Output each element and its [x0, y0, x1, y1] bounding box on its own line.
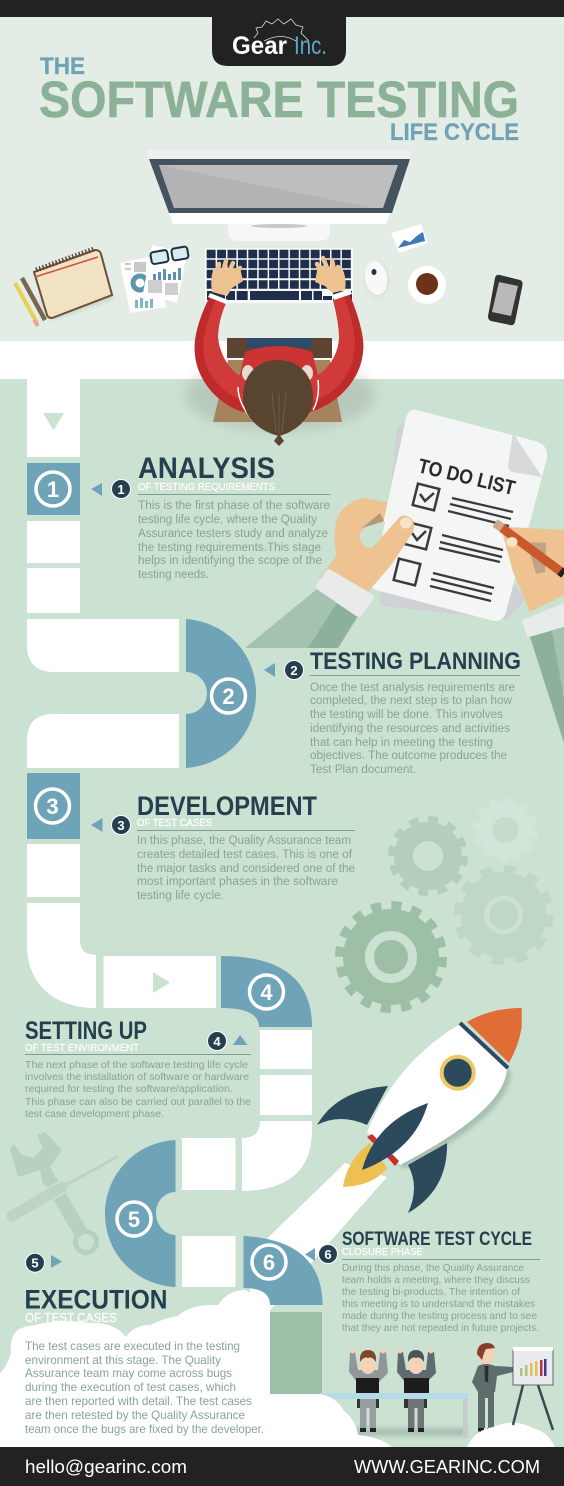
- panel: execution: OF TEST CASES: [25, 1310, 117, 1325]
- panel: setting up: involves the installation of software or hardware: [25, 1071, 249, 1083]
- mouse: [362, 259, 390, 298]
- clouds: [0, 1290, 555, 1447]
- panel: development: most important phases in the software: [137, 876, 338, 888]
- panel: development: 3: [117, 818, 125, 833]
- logo: Gear Inc.: Inc.: [294, 32, 327, 60]
- panel: setting up: This phase can also be carried out parallel to the: [25, 1096, 251, 1108]
- panel: analysis: testing needs.: [138, 569, 209, 581]
- panel: execution: are then retested by the Quality Assurance: [25, 1408, 245, 1422]
- person at desk: [185, 258, 375, 446]
- panel: analysis: This is the first phase of the software: [138, 500, 330, 512]
- footer: [0, 1447, 564, 1486]
- panel: software test cycle closure: During this phase, the Quality Assurance: [342, 1262, 524, 1274]
- step 2 path block: 2: [222, 684, 235, 709]
- panel: testing planning: TESTING PLANNING: [310, 648, 521, 675]
- panel: analysis: [91, 452, 330, 581]
- panel: software test cycle closure: team holds a meeting, where they discuss: [342, 1274, 530, 1286]
- meeting people: [320, 1343, 513, 1438]
- panel: setting up: 4: [213, 1034, 221, 1049]
- panel: development: In this phase, the Quality Assurance team: [137, 835, 351, 847]
- to do list illustration: TO DO LIST: [416, 454, 518, 500]
- panel: testing planning: [264, 648, 521, 776]
- notebook and pencils: [15, 249, 114, 326]
- panel: testing planning: identifying the resources and activities: [310, 723, 510, 735]
- coffee cup: [408, 266, 446, 304]
- step 1 path block: 1: [47, 477, 59, 502]
- panel: analysis: ANALYSIS: [138, 452, 275, 485]
- panel: development: OF TEST CASES: [137, 817, 212, 829]
- panel: execution: environment at this stage. The Quality: [25, 1353, 221, 1367]
- footer: WWW.GEARINC.COM: [354, 1457, 540, 1477]
- rocket: [317, 1008, 522, 1213]
- panel: development: [91, 791, 355, 902]
- panel: setting up: The next phase of the software testing life cycle: [25, 1059, 248, 1071]
- panel: analysis: 1: [117, 482, 125, 497]
- step 5 path block: [105, 1140, 176, 1287]
- step 1 path block: [27, 463, 80, 515]
- panel: development: creates detailed test cases. This is one of: [137, 849, 353, 861]
- panel: software test cycle closure: CLOSURE PHASE: [342, 1246, 423, 1258]
- panel: setting up: test case development phase.: [25, 1108, 164, 1120]
- step 2 path block: [27, 619, 256, 768]
- top bar: [0, 0, 564, 17]
- title: LIFE CYCLE: [390, 119, 519, 146]
- panel: execution: [24, 1253, 264, 1436]
- panel: software test cycle closure: this meeting is to understand the mistakes: [342, 1298, 535, 1310]
- panel: software test cycle closure: that they are not repeated in future projects.: [342, 1322, 539, 1334]
- panel: development: the major tasks and considered one of the: [137, 863, 355, 875]
- step 6 path block: [244, 1236, 323, 1394]
- panel: testing planning: Once the test analysis requirements are: [310, 682, 515, 694]
- panel: testing planning: the testing will be done. This involves: [310, 709, 503, 721]
- panel: software test cycle closure: made during the testing process and to see: [342, 1310, 537, 1322]
- phone: [488, 275, 523, 325]
- panel: execution: The test cases are executed in the testing: [25, 1339, 240, 1353]
- step 4 path block: [221, 956, 312, 1027]
- desk edge band: [0, 341, 564, 379]
- title: THE: [40, 53, 85, 80]
- logo: Gear Inc.: [212, 17, 346, 66]
- panel: execution: during the execution of test cases, which: [25, 1380, 236, 1394]
- path segments: top column: [27, 379, 80, 613]
- logo: Gear Inc.: Gear: [232, 32, 287, 60]
- papers and glasses: [120, 245, 189, 313]
- presentation board with chart: [513, 1347, 553, 1430]
- panel: development: testing life cycle.: [137, 890, 224, 902]
- to do list illustration: [245, 410, 564, 743]
- panel: software test cycle closure: 6: [324, 1247, 332, 1262]
- step 5 path block: 5: [128, 1207, 140, 1232]
- panel: analysis: the testing requirements.This stage: [138, 542, 321, 554]
- panel: software test cycle closure: [305, 1229, 540, 1334]
- rocket trail: [250, 1163, 387, 1310]
- panel: execution: Assurance team may come across bugs: [25, 1366, 232, 1380]
- keyboard: [205, 248, 353, 303]
- monitor: [147, 150, 411, 241]
- wrench and screwdriver icon: [10, 1132, 117, 1252]
- step 3 path block: 3: [46, 794, 59, 819]
- step 4 path block: 4: [260, 980, 273, 1005]
- header background: [0, 0, 564, 341]
- title: [39, 53, 519, 146]
- footer: hello@gearinc.com: [25, 1457, 187, 1477]
- panel: testing planning: 2: [290, 663, 298, 678]
- panel: testing planning: objectives. The outcome produces the: [310, 750, 507, 762]
- gears illustration: [343, 802, 547, 1005]
- panel: analysis: Assurance testers study and analyze: [138, 528, 328, 540]
- panel: setting up: OF TEST ENVIRONMENT: [25, 1042, 140, 1054]
- panel: testing planning: that can help in meeting the testing: [310, 737, 493, 749]
- panel: analysis: testing life cycle, where the Quality: [138, 514, 317, 526]
- step 6 path block: 6: [263, 1250, 275, 1275]
- panel: analysis: helps in identifying the scope of the: [138, 555, 322, 567]
- title: SOFTWARE TESTING: [39, 71, 519, 128]
- panel: setting up: required for testing the software/application.: [25, 1083, 233, 1095]
- panel: setting up: [25, 1017, 251, 1120]
- panel: execution: are then reported with detail. The test cases: [25, 1394, 252, 1408]
- panel: execution: team once the bugs are fixed by the developer.: [25, 1422, 264, 1436]
- step 3 path block: [27, 773, 80, 839]
- panel: setting up: SETTING UP: [25, 1017, 147, 1045]
- panel: testing planning: Test Plan document.: [310, 764, 416, 776]
- panel: development: DEVELOPMENT: [137, 791, 317, 821]
- panel: execution: EXECUTION: [24, 1284, 168, 1314]
- photo card: [391, 224, 428, 253]
- panel: software test cycle closure: the testing bi-products. The intention of: [342, 1286, 520, 1298]
- panel: testing planning: completed, the next step is to plan how: [310, 695, 513, 707]
- panel: execution: 5: [31, 1256, 39, 1271]
- panel: analysis: OF TESTING REQUIREMENTS: [138, 481, 275, 493]
- path segments: lower left bend: [27, 844, 312, 1287]
